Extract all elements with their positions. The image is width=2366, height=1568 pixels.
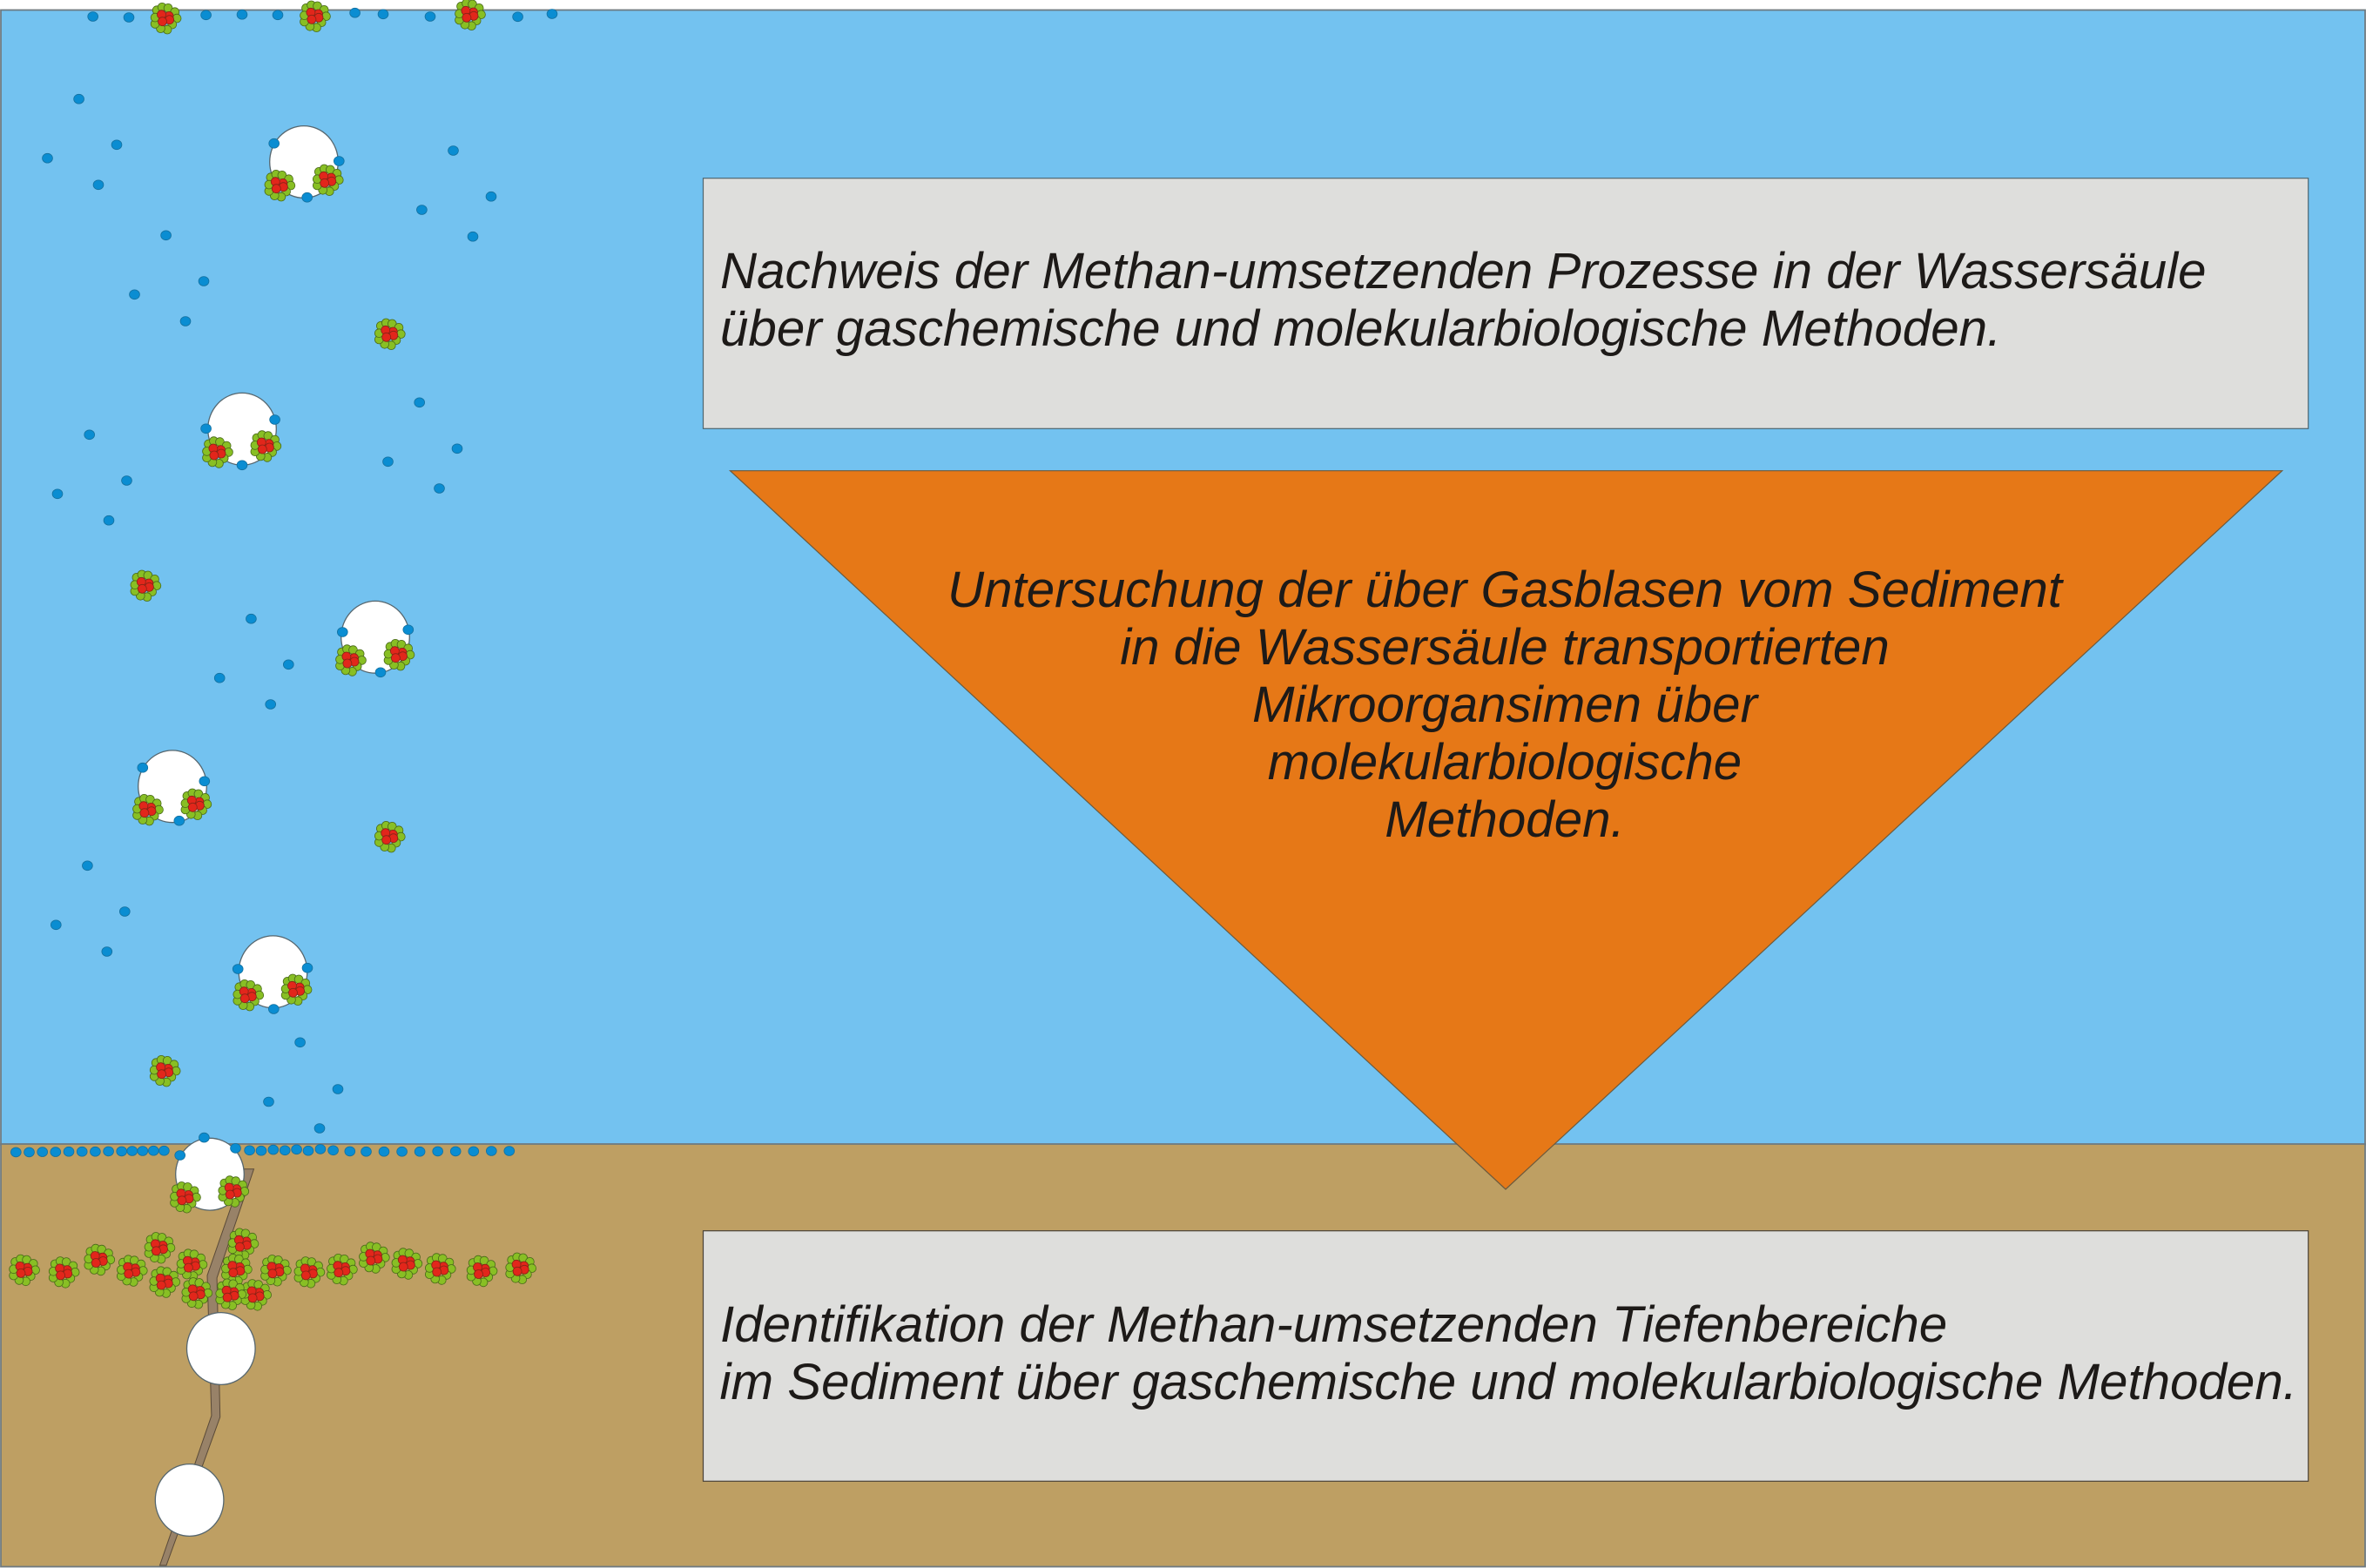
text: bubble transport methods: Untersuchung der über Gasblasen vom Sediment [947,562,2065,618]
gas bubble 8 in sediment [155,1464,224,1536]
text: sediment methods [719,1296,2297,1410]
text: bubble transport methods: molekularbiologische [1268,734,1742,791]
panel: orange funnel triangle [730,471,2282,1189]
water column [1,10,2365,1144]
gas bubble 7 in sediment [186,1313,255,1384]
dissolved methane dots in water column [43,94,496,1133]
gas bubble 6 leaving sediment [171,1133,249,1213]
microbe clusters in sediment band [10,1228,536,1310]
text: sediment methods: im Sediment über gaschemische und molekularbiologische Methoden. [719,1354,2297,1410]
free microbe clusters in water column [131,319,405,1087]
gas bubble 5 with microbes [233,936,313,1013]
sediment fissure [160,1169,254,1565]
methane dots at sediment surface [10,1144,515,1157]
text: bubble transport methods: Mikroorgansimen über [1252,676,1760,733]
surface microbe clusters [151,0,485,34]
panel: water column methods [704,178,2309,428]
panel: sediment methods [704,1231,2309,1481]
text: water column methods: Nachweis der Methan-umsetzenden Prozesse in der Wassersäule [720,243,2207,299]
text: water column methods: über gaschemische und molekularbiologische Methoden. [720,300,2001,357]
text: bubble transport methods: Methoden. [1385,791,1625,848]
sediment layer [1,1144,2365,1567]
text: water column methods [720,243,2207,357]
surface methane dots at water top [88,8,557,22]
text: sediment methods: Identifikation der Methan-umsetzenden Tiefenbereiche [720,1296,1947,1353]
text: bubble transport methods: in die Wassersäule transportierten [1120,619,1890,676]
gas bubble 1 with microbes [265,126,344,202]
text: bubble transport methods [947,562,2065,848]
gas bubble 4 with microbes [133,750,212,825]
gas bubble 3 with microbes [336,601,415,677]
gas bubble 2 with microbes [201,393,281,470]
